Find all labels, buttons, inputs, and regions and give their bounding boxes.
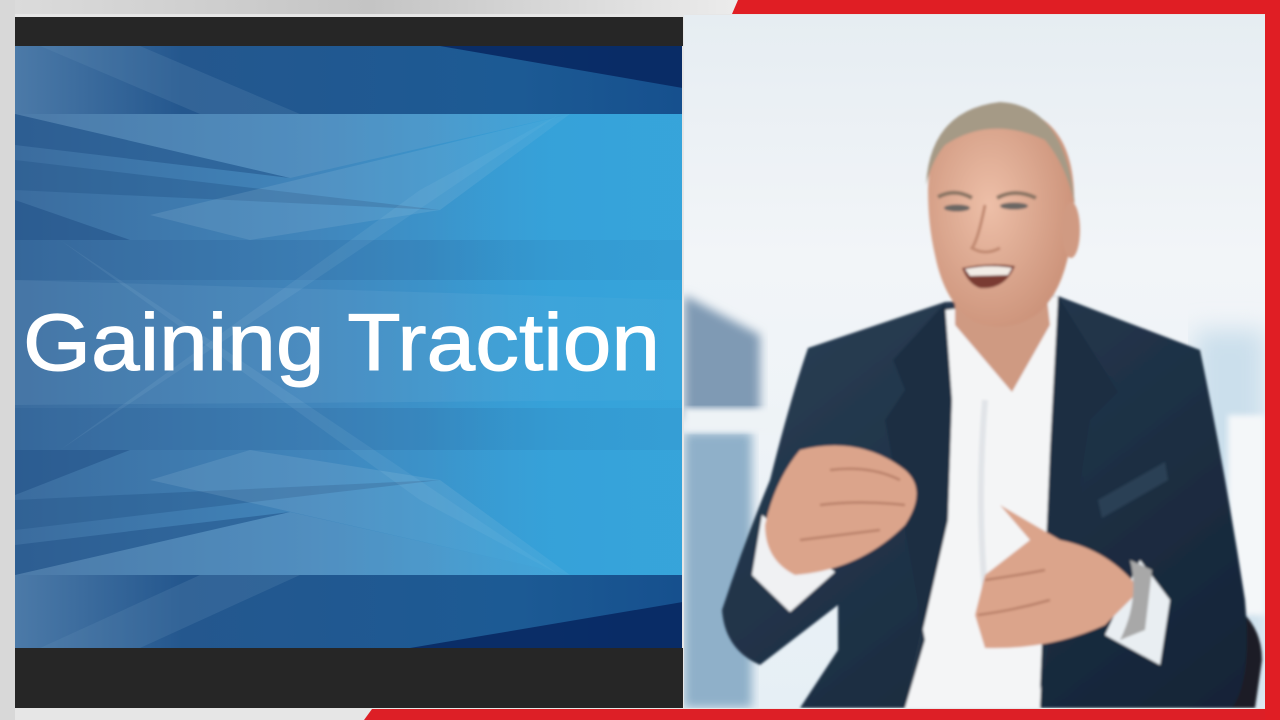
neck: [952, 302, 1052, 392]
right finger lines: [978, 570, 1050, 615]
head: [928, 106, 1074, 327]
blue abstract background: [15, 46, 683, 648]
chair: [1230, 616, 1264, 708]
panel: portrait photo: [684, 15, 1265, 708]
right lapel: [1038, 298, 1072, 690]
eyebrows: [938, 193, 1036, 198]
mouth: [962, 264, 1015, 288]
shirt: [905, 296, 1058, 708]
watch: [1120, 560, 1152, 640]
hand right: [975, 505, 1140, 648]
eyes: [944, 202, 1028, 212]
left finger lines: [800, 469, 905, 540]
jacket pocket: [1098, 462, 1168, 518]
person: [722, 102, 1262, 708]
blurred office background: [684, 15, 1265, 708]
shirt cuff right: [1105, 560, 1170, 665]
ear: [1066, 203, 1082, 260]
hand left: [765, 446, 916, 575]
title text: Gaining Traction: [23, 298, 660, 388]
panel: title slide: [15, 17, 683, 708]
shirt fold shadow: [978, 400, 988, 584]
jacket: [722, 296, 1247, 708]
top dark bar: [15, 17, 683, 46]
shirt cuff left: [752, 515, 835, 612]
nose: [972, 205, 1000, 252]
left lapel: [885, 303, 952, 708]
bottom dark bar: [15, 648, 683, 708]
hair: [926, 102, 1075, 205]
